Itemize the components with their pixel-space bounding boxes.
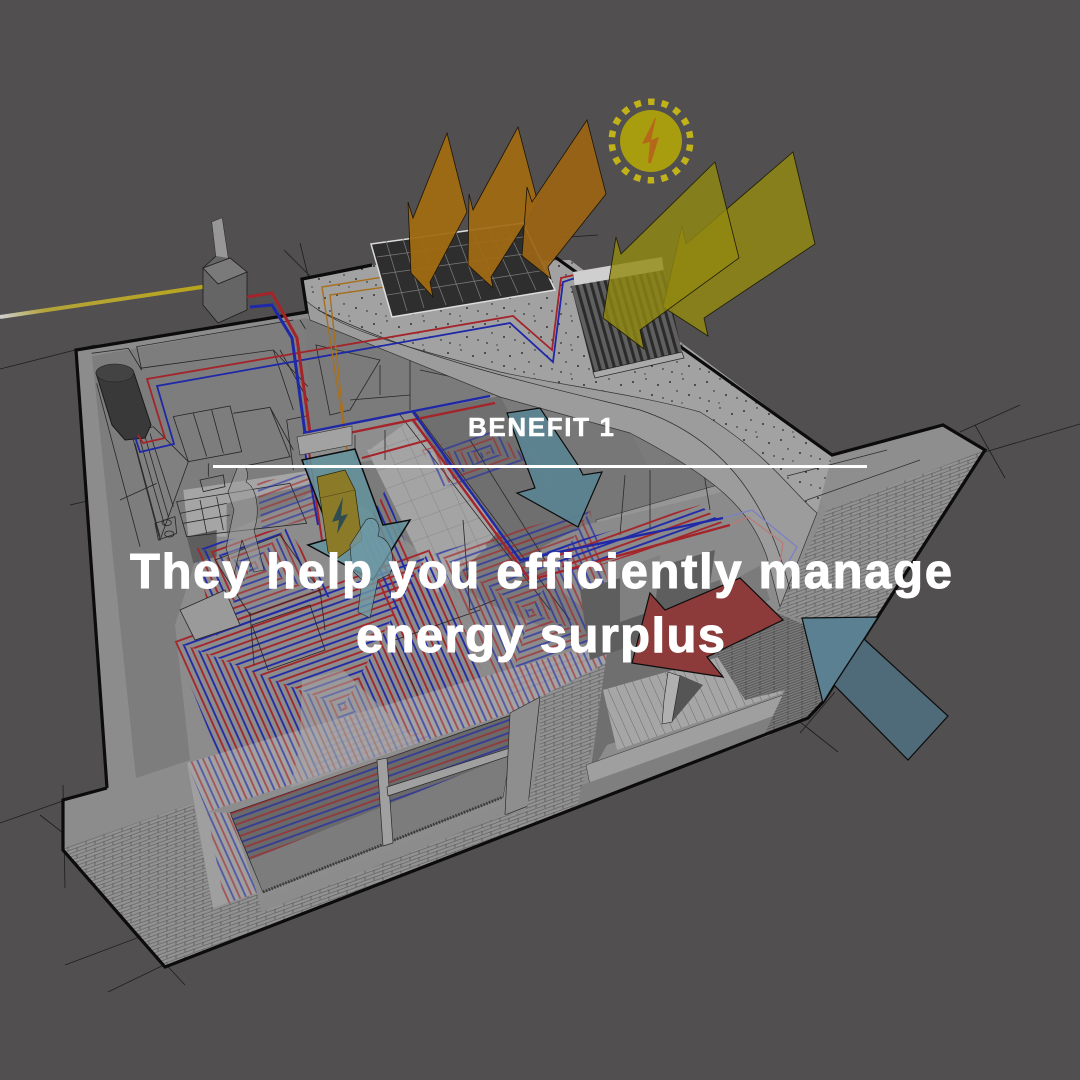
- orange electric lines: [322, 277, 385, 450]
- person on balcony: [662, 672, 703, 724]
- person at sink: [226, 465, 264, 575]
- wire to boiler: [0, 284, 222, 317]
- furniture: [180, 520, 495, 700]
- arrow: blue indoor air: [507, 408, 602, 527]
- window mullions: [377, 697, 540, 846]
- solar panels: [371, 223, 555, 317]
- arrows: yellow solar heat: [603, 152, 815, 349]
- battery: [317, 470, 362, 560]
- room wall lines: [316, 345, 710, 620]
- solar thermal collector: [571, 257, 684, 378]
- kitchen details: [92, 320, 400, 563]
- label: benefit: BENEFIT 1: [468, 412, 614, 442]
- arrow: blue intake: [802, 617, 948, 760]
- underfloor heating: top-left spiral: [195, 490, 440, 640]
- manifold pipes: [305, 403, 495, 442]
- balcony: [577, 550, 785, 807]
- figures: [226, 465, 703, 724]
- brick strip below window: [165, 807, 577, 967]
- manifold box: [297, 426, 352, 455]
- brick pier centre: [520, 660, 612, 830]
- icon: water tank: [96, 364, 151, 440]
- icon: sun with lightning bolt: [612, 102, 690, 180]
- wall top right: [812, 425, 985, 510]
- roof circuit: [138, 275, 574, 443]
- arrow: blue down into battery: [302, 449, 410, 580]
- central rooms: [298, 318, 770, 660]
- front window opening: [207, 713, 517, 905]
- front floor slab: [187, 640, 622, 908]
- heading: [130, 545, 952, 663]
- heading: They help you efficiently manage: [130, 545, 952, 599]
- slab left drop: [187, 763, 257, 908]
- underfloor heating: right spiral: [435, 510, 625, 697]
- icon: bolt: [332, 497, 348, 534]
- building silhouette: [63, 260, 985, 967]
- heading: energy surplus: [356, 609, 725, 663]
- table top over spiral: [290, 670, 418, 788]
- brick wall lower right: [710, 612, 875, 733]
- outer black edge: [63, 257, 985, 967]
- arrow: red exhaust: [632, 578, 783, 677]
- riser: [247, 293, 310, 433]
- bright pipe floor strip: [545, 505, 725, 575]
- heating pipes: [135, 275, 797, 580]
- brick wall front left: [63, 803, 262, 967]
- underfloor heating: main spiral: [172, 548, 523, 866]
- divider under label: [213, 465, 867, 468]
- construction sketch lines: [0, 235, 1080, 992]
- underfloor heating: faded upper spirals: [257, 430, 533, 530]
- person by battery: [350, 518, 393, 618]
- roof speckled: [302, 260, 832, 513]
- curved roof band: [305, 300, 817, 607]
- faded pipe ends: [730, 517, 783, 577]
- arrows: orange solar energy: [408, 120, 606, 297]
- arc lines: [318, 310, 920, 640]
- house cutaway: [63, 257, 985, 967]
- kitchen room floor: [92, 318, 330, 778]
- brick wall right: [777, 450, 985, 620]
- icon: boiler with flue: [203, 218, 247, 323]
